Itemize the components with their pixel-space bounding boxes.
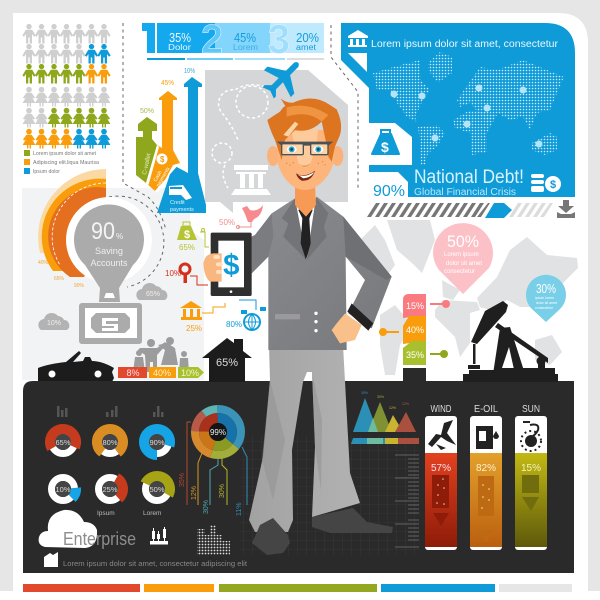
- growth arrows: payments: [170, 207, 194, 213]
- growth arrows: Cash: [153, 170, 164, 183]
- numbered percent banner: Lorem: [233, 43, 258, 52]
- donut charts: 50%: [149, 485, 165, 494]
- big multi ring donut: [195, 409, 241, 455]
- shoes: [252, 508, 393, 555]
- house with 65%: [202, 338, 252, 382]
- icon: bank: [231, 165, 271, 195]
- cloud enterprise: Enterprise: [63, 529, 136, 549]
- triangle chart: 35%: [361, 391, 368, 395]
- icon: money weight: $: [381, 139, 389, 155]
- triangle chart: 12%: [389, 406, 396, 410]
- numbered percent banner: Dolor: [168, 43, 191, 52]
- ruler ticks: [395, 455, 419, 547]
- numbered percent banner: 35%: [169, 30, 191, 45]
- percent stack: 40%: [406, 325, 424, 335]
- percentage ribbon: 40%: [153, 368, 171, 378]
- triangle chart: 30%: [377, 395, 384, 399]
- people pictogram chart: [22, 24, 111, 148]
- footer text: Lorem ipsum dolor sit amet, consectetur adipiscing elit: [63, 559, 248, 568]
- energy card: e-oil: [470, 404, 502, 550]
- growth arrows: 10%: [184, 68, 195, 75]
- legend: Adipiscing elit.liqua Maurisa: [33, 160, 100, 166]
- pin: 30%: ipsum lorem: [535, 296, 554, 300]
- icon: coins: [531, 174, 561, 192]
- pin: 50%: consectetur: [444, 269, 475, 275]
- percentage ribbon: [118, 367, 204, 378]
- car: [38, 351, 114, 382]
- orbit icon: globe 80%: 80%: [226, 320, 242, 329]
- phone: $: [223, 249, 239, 282]
- pin: 50%: 50%: [447, 232, 479, 251]
- legend: Lorem ipsum dolor sit amet: [33, 151, 96, 157]
- orbit icon: green weight 65%: [177, 222, 209, 252]
- savings arcs: [38, 169, 152, 289]
- orbit icon: green weight 65%: $: [184, 229, 190, 241]
- energy card: e-oil: E-OIL: [474, 404, 498, 415]
- panel: national debt: Lorem ipsum dolor sit amet, consectetur: [371, 39, 559, 50]
- numbered percent banner: 3: [268, 16, 290, 62]
- donut charts: 90%: [149, 438, 165, 447]
- icon: candlestick chart: [150, 527, 168, 544]
- donut charts: 25%: [102, 485, 118, 494]
- clouds: 10%: [47, 320, 61, 327]
- balloon: saving accounts: [74, 205, 144, 344]
- panel: dark enterprise section: [23, 381, 574, 573]
- dashed connector lines: [109, 23, 358, 287]
- donut leader lines and labels: 30%: [219, 484, 226, 498]
- dotted world map: [373, 52, 564, 165]
- orbit icon: bird 50%: 50%: [219, 218, 235, 227]
- legend: [24, 150, 100, 175]
- energy card: sun: 15%: [521, 463, 541, 474]
- oil pump: [463, 301, 558, 382]
- light backdrop panel behind savings: [22, 188, 204, 380]
- donut charts: [45, 424, 174, 507]
- percentage ribbon: 10%: [181, 368, 199, 378]
- donut leader lines and labels: 35%: [179, 473, 186, 487]
- donut captions: Lorem: [143, 510, 161, 517]
- orbit icon: orange bank 25%: [180, 301, 225, 333]
- donut captions: Ipsum: [97, 510, 115, 517]
- small bar icons: [57, 406, 164, 417]
- pin: 50%: Lorem ipsum: [444, 252, 479, 258]
- energy card: wind: [425, 404, 457, 550]
- energy card: sun: SUN: [522, 404, 540, 415]
- percent stack: 35%: [406, 350, 424, 360]
- panel: national debt: National Debt!: [414, 167, 524, 188]
- orbit icon: green weight 65%: 65%: [179, 243, 195, 252]
- pin: 30%: dolor sit amet: [536, 301, 557, 305]
- trousers: [249, 345, 360, 532]
- icon: download: [557, 200, 575, 218]
- grey world map background: [360, 220, 578, 375]
- icon: plane: [255, 49, 312, 106]
- house with 65%: 65%: [216, 357, 238, 369]
- balloon: saving accounts: Accounts: [90, 258, 128, 268]
- family: [133, 337, 189, 372]
- pin: 30%: [526, 275, 566, 322]
- balloon: saving accounts: Saving: [95, 246, 123, 256]
- growth arrows: payments: [155, 166, 172, 188]
- icon: money weight: [372, 130, 399, 155]
- donut captions: [97, 510, 161, 517]
- clouds: [38, 283, 167, 330]
- balloon: saving accounts: %: [116, 232, 123, 241]
- icon: chart tile: [44, 552, 58, 567]
- growth arrows: [136, 68, 206, 213]
- donut charts: 10%: [55, 485, 71, 494]
- icon: coins: $: [550, 179, 556, 191]
- percent stack: [379, 294, 450, 382]
- grey speech panel with route and bank: [205, 70, 348, 213]
- donut leader lines and labels: 12%: [191, 486, 198, 500]
- clouds: 65%: [146, 291, 160, 298]
- cloud enterprise: [39, 510, 136, 549]
- panel: national debt: Global Financial Crisis: [414, 187, 516, 198]
- triangle chart: [351, 391, 419, 444]
- man with phone: [203, 98, 393, 555]
- panel: national debt: 90%: [373, 183, 405, 200]
- orbit icon: globe 80%: [226, 300, 266, 330]
- growth arrows: 50%: [140, 108, 154, 115]
- donut charts: 65%: [55, 438, 71, 447]
- balloon: saving accounts: 90: [91, 218, 115, 245]
- growth arrows: C-wallet: [142, 153, 153, 175]
- phone: [203, 233, 252, 296]
- triangle chart: 12%: [402, 402, 409, 406]
- progress stripes: [367, 203, 553, 218]
- numbered percent banner: 45%: [234, 30, 256, 45]
- pin: 30%: 30%: [536, 281, 556, 296]
- legend: Ipsum dolor: [33, 169, 60, 175]
- savings arcs: 90%: [74, 283, 85, 289]
- energy card: sun: [515, 404, 547, 550]
- colour footer bars: [23, 584, 572, 592]
- energy card: wind: 57%: [431, 463, 451, 474]
- donut charts: 80%: [102, 438, 118, 447]
- donut leader lines and labels: 30%: [203, 500, 210, 514]
- jacket: [252, 197, 392, 350]
- pin: 50%: [433, 223, 493, 294]
- savings arcs: 40%: [38, 260, 49, 266]
- orbit icon: red key 10%: 10%: [165, 269, 181, 278]
- head: [267, 98, 343, 217]
- donut leader lines and labels: 11%: [236, 502, 243, 516]
- numbered percent banner: amet: [296, 43, 317, 52]
- growth arrows: 45%: [161, 80, 174, 87]
- orbit icon: bird 50%: [219, 205, 263, 228]
- energy card: e-oil: 82%: [476, 463, 496, 474]
- donut leader lines and labels: [179, 422, 247, 516]
- percent stack: 15%: [406, 301, 424, 311]
- energy card: wind: WIND: [430, 404, 452, 415]
- growth arrows: Credit: [170, 200, 185, 206]
- pin: 50%: dolor sit amet: [446, 261, 482, 267]
- orbit icon: red key 10%: [165, 264, 208, 285]
- numbered percent banner: 2: [201, 16, 223, 62]
- dotted skyline chart: [197, 525, 230, 555]
- panel: national debt: [341, 23, 575, 200]
- pin: 30%: consectetur: [535, 306, 554, 310]
- growth arrows: $: [160, 155, 165, 164]
- numbered percent banner: 20%: [296, 30, 319, 45]
- big multi ring donut: 99%: [210, 428, 226, 437]
- savings arcs: 65%: [54, 276, 65, 282]
- icon: bank white: [348, 30, 368, 47]
- orbit icon: orange bank 25%: 25%: [186, 324, 202, 333]
- percentage ribbon: 8%: [126, 368, 140, 378]
- numbered percent banner: [142, 16, 324, 62]
